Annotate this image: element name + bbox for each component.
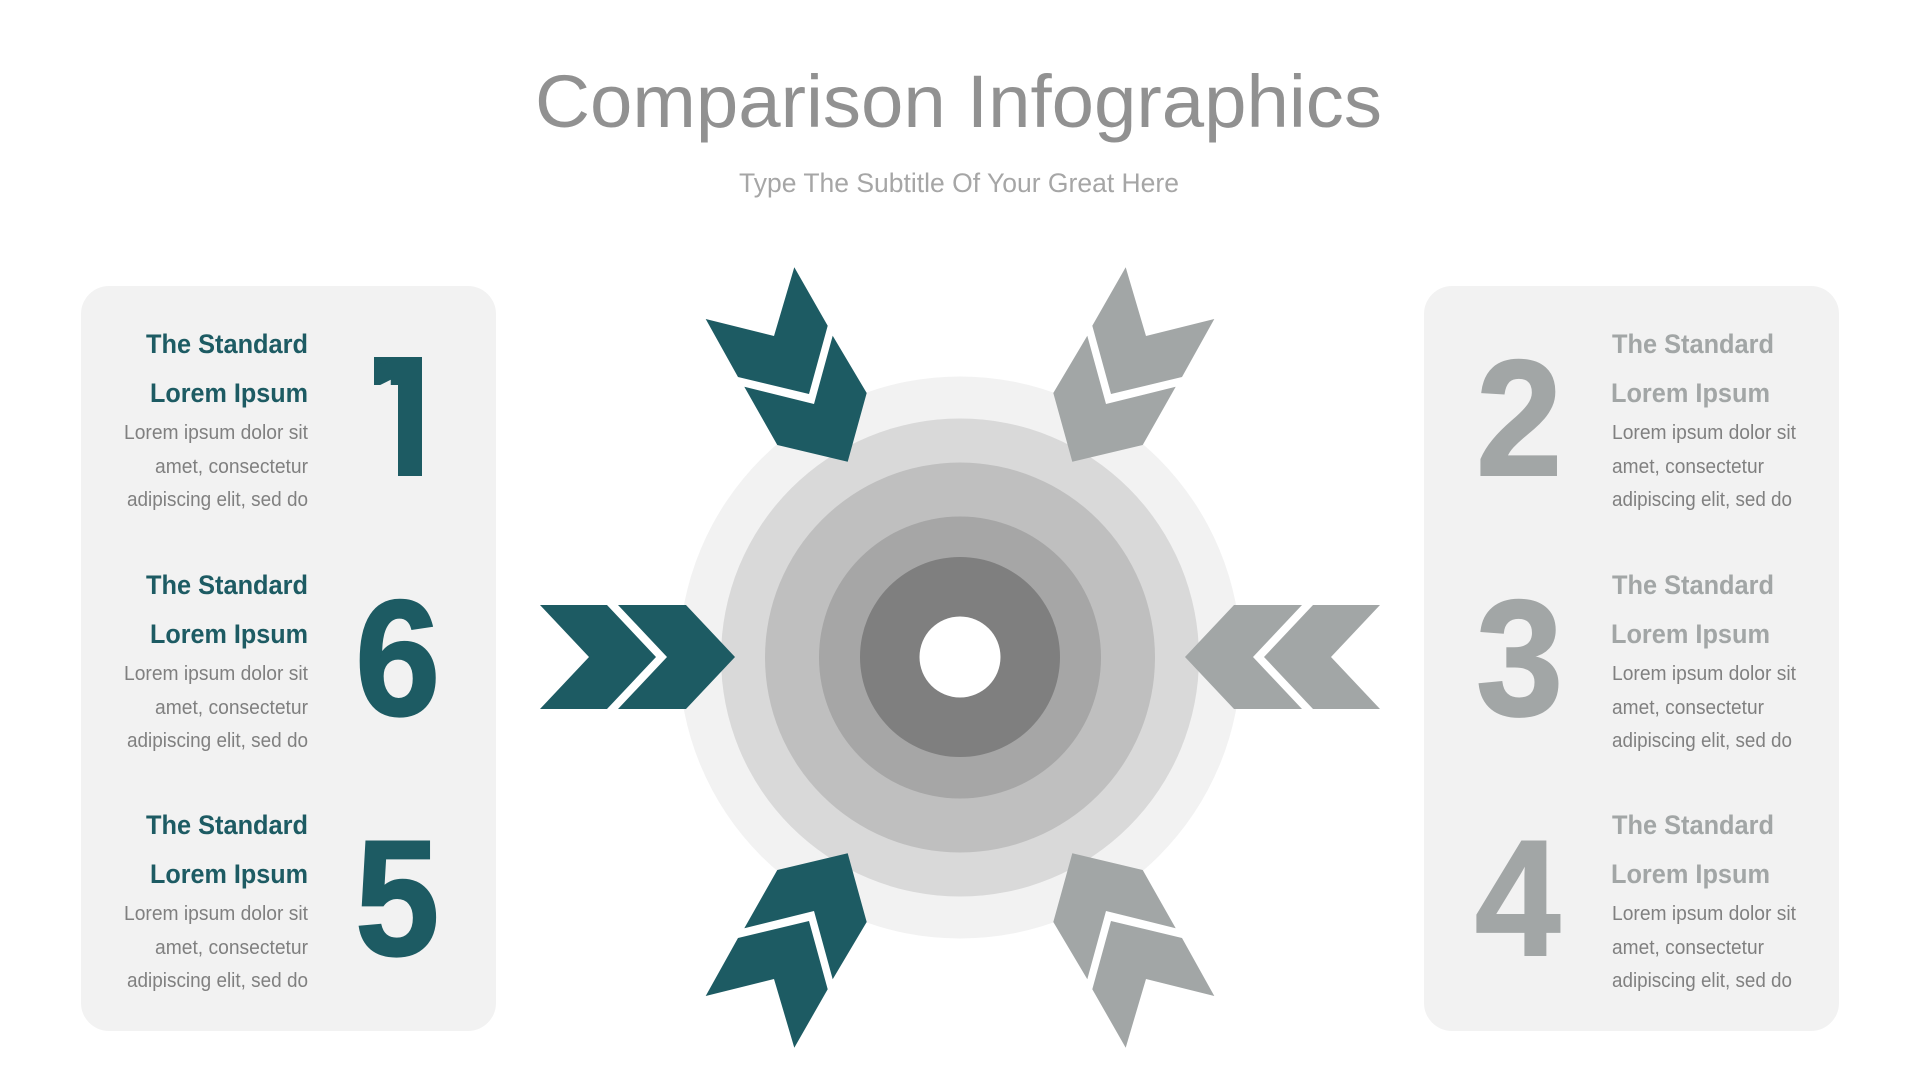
item 5: The Standard	[146, 810, 308, 840]
item 1: adipiscing elit, sed do	[127, 489, 308, 511]
item 1	[126, 334, 422, 510]
panel: left items	[81, 286, 496, 1031]
panel: right items	[1424, 286, 1839, 1031]
item 3: Lorem Ipsum	[1611, 619, 1770, 649]
item 5: Lorem ipsum dolor sit	[124, 903, 308, 925]
arrow: bottom right (item 4)	[1053, 853, 1214, 1048]
item 6: Lorem Ipsum	[150, 619, 308, 649]
item 2: The Standard	[1612, 329, 1774, 359]
item 1: Lorem Ipsum	[150, 378, 308, 408]
item 6: adipiscing elit, sed do	[127, 730, 308, 752]
item 4: The Standard	[1612, 810, 1774, 840]
title: Comparison Infographics	[535, 60, 1382, 143]
arrow: middle right (item 3)	[1185, 605, 1380, 709]
item 6	[124, 566, 440, 752]
left panel background	[81, 286, 496, 1031]
item 2: Lorem ipsum dolor sit	[1612, 422, 1796, 444]
item 1: The Standard	[146, 329, 308, 359]
item 4: amet, consectetur	[1612, 937, 1764, 959]
item 1: amet, consectetur	[155, 456, 308, 478]
item 4	[1475, 806, 1796, 992]
item 3: The Standard	[1612, 570, 1774, 600]
item 3	[1476, 566, 1796, 752]
item 6: amet, consectetur	[155, 697, 308, 719]
item 2: adipiscing elit, sed do	[1612, 489, 1792, 511]
item 1: 1	[342, 322, 461, 512]
arrow: middle left (item 6)	[540, 605, 735, 709]
item 4: Lorem ipsum dolor sit	[1612, 903, 1796, 925]
arrow: top left (item 1)	[706, 267, 867, 462]
item 5: 5	[355, 805, 439, 990]
item 4: adipiscing elit, sed do	[1612, 970, 1792, 992]
item 6: Lorem ipsum dolor sit	[124, 663, 308, 685]
item 6: The Standard	[146, 570, 308, 600]
item 5: amet, consectetur	[155, 937, 308, 959]
item 2: Lorem Ipsum	[1611, 378, 1770, 408]
item 5: Lorem Ipsum	[150, 859, 308, 889]
item 3: Lorem ipsum dolor sit	[1612, 663, 1796, 685]
item 5: adipiscing elit, sed do	[127, 970, 308, 992]
item 2: amet, consectetur	[1612, 456, 1764, 478]
item 1: Lorem ipsum dolor sit	[124, 422, 308, 444]
arrow: bottom left (item 5)	[706, 853, 867, 1048]
item 3: amet, consectetur	[1612, 697, 1764, 719]
item 2: 2	[1476, 326, 1562, 510]
item 4: Lorem Ipsum	[1611, 859, 1770, 889]
item 4: 4	[1475, 806, 1560, 990]
subtitle: Type The Subtitle Of Your Great Here	[739, 168, 1179, 198]
item 3: 3	[1476, 566, 1563, 751]
item 5	[124, 805, 439, 992]
arrow: top right (item 2)	[1053, 267, 1214, 462]
item 6: 6	[355, 566, 440, 750]
item 2	[1476, 326, 1796, 511]
right panel background	[1424, 286, 1839, 1031]
concentric circles	[679, 376, 1241, 938]
item 3: adipiscing elit, sed do	[1612, 730, 1792, 752]
